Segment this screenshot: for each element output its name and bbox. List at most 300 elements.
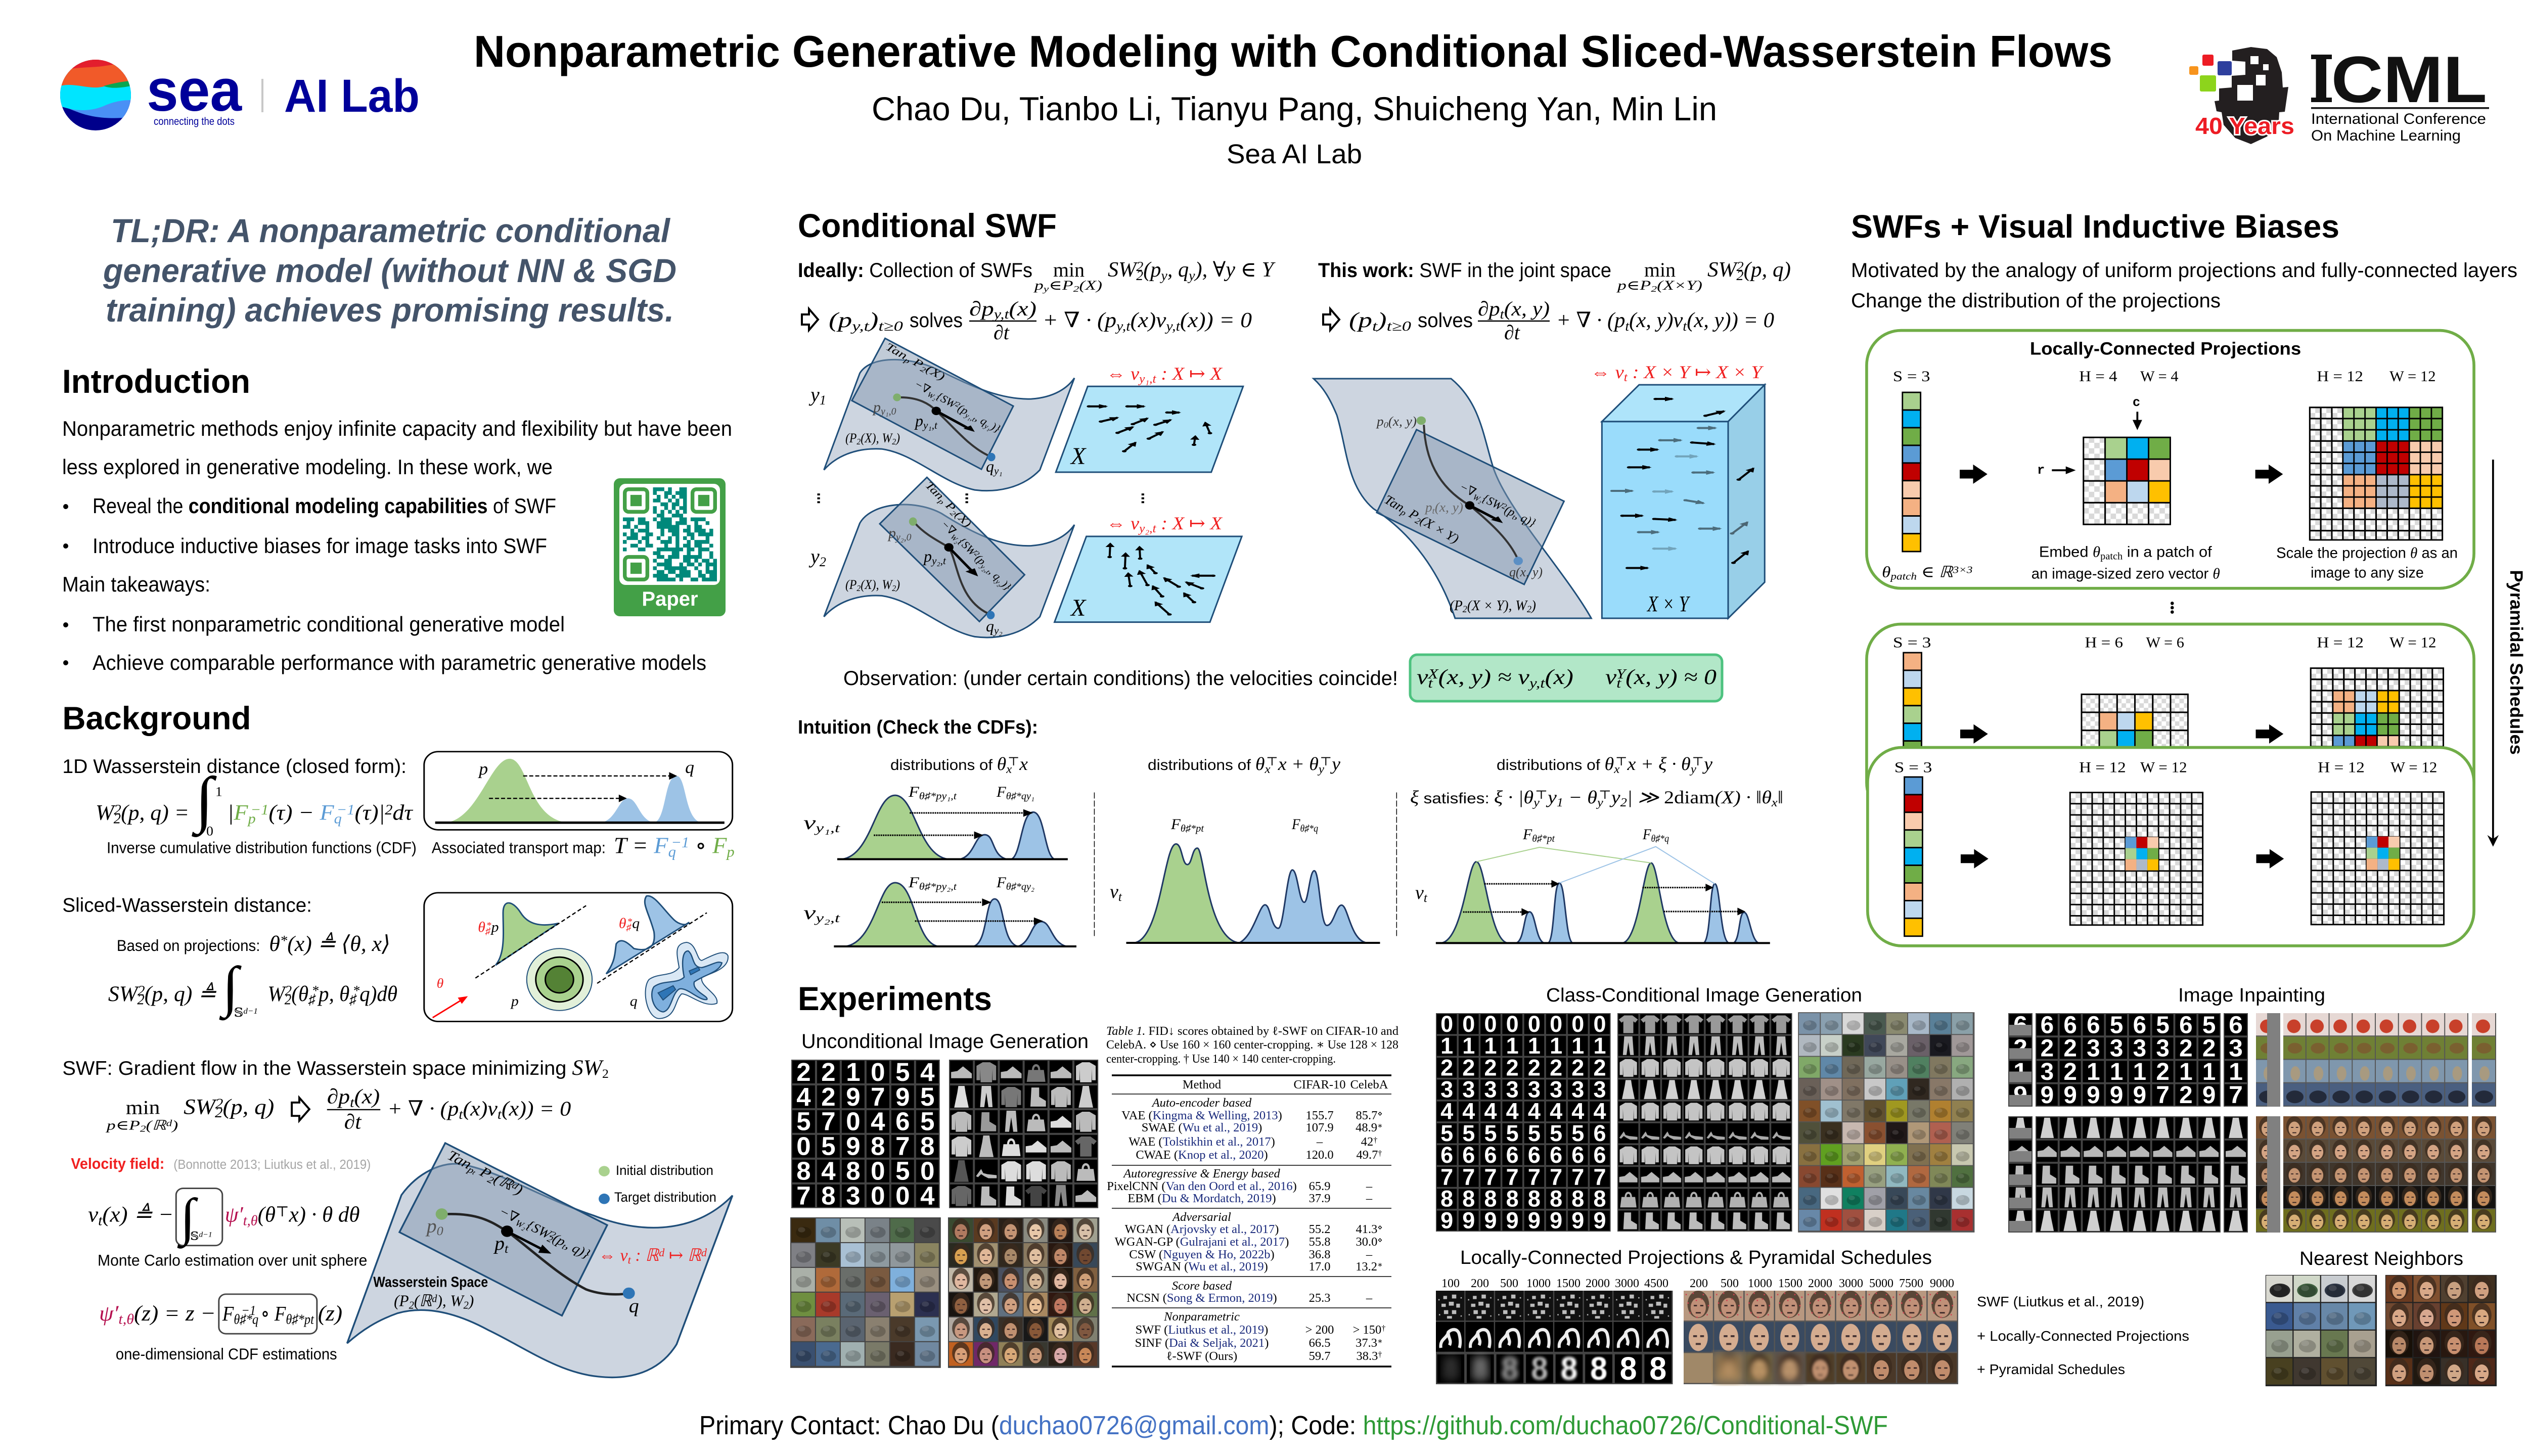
table: FID scores: > 150† (1353, 1323, 1385, 1337)
label text: joint space: q(x, y) (1509, 565, 1543, 579)
label text: CDF densities: vt (1415, 882, 1428, 905)
axis labels: iteration counts MNIST: 1500 (1556, 1277, 1581, 1290)
panel: locally-connected projections: θpatch ∈ ℝ 3×3 (1882, 563, 1973, 582)
title: Nonparametric Generative Modeling with Conditional Sliced-Wasserstein Flows (474, 26, 2112, 76)
panel: projection patch H=12 (1868, 748, 2474, 946)
table: FID scores: ℓ-SWF (Ours) (1166, 1349, 1237, 1363)
subheading: class-conditional: Class-Conditional Image Generation (1546, 985, 1862, 1006)
table: FID scores: 25.3 (1309, 1291, 1330, 1305)
text: ideally (798, 258, 1276, 294)
diagram: Wasserstein space manifold: pt (493, 1233, 509, 1256)
label text: y1 diagram: qy₁ (986, 457, 1003, 477)
label: pyramidal: + Pyramidal Schedules (1977, 1361, 2125, 1377)
text: ideally: Ideally: Collection of SWFs (798, 259, 1032, 282)
formula: this work continuity: ∂t (1504, 321, 1520, 344)
diagram: velocity box X x Y (1602, 385, 1765, 618)
image grid: class-conditional Fashion (1617, 1013, 1792, 1232)
subheading: unconditional: Unconditional Image Generation (801, 1030, 1089, 1053)
image grid: class-conditional MNIST: 55555556 (1440, 1120, 1606, 1146)
logo: Sea AI Lab (60, 57, 420, 130)
table: FID scores: 65.9 (1309, 1179, 1330, 1193)
text: 1D Wasserstein: 1D Wasserstein distance (closed form): (62, 756, 407, 778)
formula: W2: W22(p, q) = (96, 800, 189, 827)
image grid: inpainting CelebA (2256, 1116, 2496, 1233)
table: FID scores: EBM (Du & Mordatch, 2019) (1127, 1192, 1276, 1205)
formula: psi: ψ′t,θ(z) = z − (99, 1301, 216, 1327)
caption: transport map: Associated transport map: (432, 839, 606, 856)
formula: gradient flow (105, 1085, 571, 1134)
table: FID scores: Score based (1172, 1279, 1232, 1293)
image grid: inpainting Fashion (2008, 1116, 2248, 1233)
label: SWF: SWF (Liutkus et al., 2019) (1977, 1294, 2144, 1309)
legend: initial distribution: Initial distribution (616, 1163, 713, 1178)
label: pyramidal schedules: Pyramidal Schedules (2506, 570, 2526, 755)
image grid: CIFAR samples (790, 1217, 941, 1368)
axis labels: iteration counts CelebA: 2000 (1808, 1277, 1832, 1290)
table: FID scores: Autoregressive & Energy based (1122, 1167, 1281, 1180)
axis labels: iteration counts MNIST: 500 (1500, 1277, 1518, 1290)
label text: CDF densities: Fθ♯*p y₁,t (908, 784, 957, 802)
label text: joint space: (P2(X × Y), W2) (1450, 598, 1536, 614)
image grid: nearest neighbors CIFAR (2266, 1275, 2377, 1386)
text: based on projections: Based on projections: (117, 937, 260, 954)
formula: this work continuity: + ∇ · (pt(x, y)vt(x, y)) = 0 (1556, 309, 1774, 334)
label text: CDF densities: Fθ♯*p y₂,t (908, 874, 957, 892)
text: ideally: SW22(py, qy), ∀y ∈ Y (1108, 258, 1276, 283)
table: FID scores: 36.8 (1309, 1248, 1330, 1261)
axis labels: iteration counts MNIST: 2000 (1586, 1277, 1610, 1290)
label text: CDF densities: Fθ♯*q (1291, 816, 1318, 834)
text: this work: This work: SWF in the joint space (1318, 259, 1611, 282)
image grid: class-conditional MNIST: 66666666 (1440, 1142, 1606, 1168)
label text: CDF densities: Fθ♯*q (1642, 826, 1669, 844)
text: SWF gradient flow: SWF: Gradient flow in the Wasserstein space minimizing SW2 (62, 1055, 609, 1081)
subheading: LCP and pyramidal: Locally-Connected Projections & Pyramidal Schedules (1460, 1247, 1932, 1268)
panel: projection patch H=12: H = 12 (2318, 759, 2365, 776)
table: FID scores: 41.3⋄ (1356, 1222, 1382, 1236)
table: FID scores: – (1366, 1248, 1373, 1261)
subheading: inpainting: Image Inpainting (2178, 985, 2325, 1006)
image grid: class-conditional MNIST: 00000000 (1440, 1011, 1606, 1037)
diagram: Wasserstein space manifold: −∇W₂{SW22(pt, q)} (496, 1204, 593, 1262)
image grid: Fashion samples (949, 1060, 1098, 1208)
text: this work: SW22(p, q) (1707, 258, 1791, 283)
table: FID scores: SWF (Liutkus et al., 2019) (1136, 1323, 1268, 1337)
table: FID scores: SINF (Dai & Seljak, 2021) (1135, 1336, 1269, 1350)
text: observation: Observation: (under certain conditions) the velocities coincide! (843, 667, 1398, 690)
image grid: MNIST samples: 783004 (796, 1181, 935, 1210)
image grid: inpainting MNIST: 66656565 (2041, 1012, 2216, 1039)
formula: SW: 𝕊d−1 (234, 1006, 258, 1020)
footer: contact: Primary Contact: Chao Du (duchao0726@gmail.com); Code: https://github.com/duchao0726/Conditional-SWF (699, 1411, 1888, 1440)
label text: CDF densities (803, 784, 1669, 925)
dots (2171, 602, 2174, 614)
label text: CDF densities: v y₁,t (803, 812, 840, 835)
introduction text: Introduce inductive biases for image tasks into SWF (93, 534, 547, 558)
label text: y1 diagram: (P2(X), W2) (845, 431, 900, 446)
section: Background (62, 700, 735, 1378)
image grid: inpainting MNIST: 1 (2013, 1059, 2027, 1085)
label text: joint space: Tanp P2(X × Y) (1381, 492, 1461, 547)
image grid: LCP MNIST progress: 8 (1531, 1351, 1548, 1387)
image grid: inpainting MNIST: 32111211 (2041, 1059, 2216, 1085)
formula: W2: ∫ (192, 764, 217, 838)
label text: y2 diagram: (P2(X), W2) (845, 577, 900, 593)
formula: gradient flow: ∂t (344, 1111, 362, 1133)
heading: SWFs + Visual Inductive Biases: SWFs + Visual Inductive Biases (1851, 208, 2339, 245)
axis labels: iteration counts CelebA: 1000 (1748, 1277, 1772, 1290)
chart: 1D transport box: q (685, 758, 694, 777)
text: ideally: p y∈P 2(X) (1033, 278, 1102, 294)
formula: W2: 0 (206, 824, 213, 839)
panel: locally-connected projections: Scale the projection θ as an (2276, 544, 2458, 561)
table: FID scores: CelebA. ⋄ Use 160 × 160 center-cropping. ∗ Use 128 × 128 (1106, 1038, 1398, 1052)
formula: SW: W22(θ♯*p, θ♯*q)dθ (267, 981, 397, 1008)
table: FID scores: 38.3† (1357, 1349, 1382, 1363)
formula: transport map: T = Fq−1 ∘ Fp (614, 834, 735, 860)
diagram: velocity plane y1 (1056, 386, 1243, 472)
introduction text: Reveal the conditional modeling capabilities of SWF (93, 494, 556, 518)
callout: velocity coincide (1410, 655, 1722, 701)
diagram: Wasserstein space manifold (347, 1143, 733, 1378)
table: FID scores: 42† (1361, 1135, 1377, 1149)
diagram: Wasserstein space manifold: (P2(ℝd), W2) (394, 1292, 474, 1311)
image grid: inpainting MNIST: 22333322 (2041, 1035, 2216, 1062)
diagram: velocity plane y2 (1055, 536, 1242, 622)
panel: locally-connected projections (1867, 331, 2474, 588)
label text: y1 diagram: Tanp P2(X) (883, 340, 947, 384)
axis labels: iteration counts CelebA (1690, 1277, 1954, 1290)
label text: joint space: ⇔ vt : X × Y ↦ X × Y (1591, 362, 1764, 384)
chart: sliced projection box: θ♯*q (619, 916, 640, 933)
panel: projection patch H=12: S = 3 (1894, 759, 1932, 776)
logo: ICML: On Machine Learning (2311, 127, 2461, 144)
diagram: Wasserstein space manifold: ⇔ vt : ℝd ↦ ℝd (599, 1246, 707, 1266)
formula: gradient flow: + ∇ · (pt(x)vt(x)) = 0 (387, 1097, 571, 1122)
label text: CDF densities: Fθ♯*qy₂ (996, 874, 1034, 892)
TL;DR statement: TL;DR: A nonparametric conditional (111, 212, 671, 249)
logo: ICML: ICML (2311, 42, 2487, 116)
table: FID scores: 120.0 (1305, 1148, 1334, 1162)
label text: y2 diagram: Tanp P2(X) (922, 479, 974, 531)
formula: ideally continuity (802, 297, 1252, 344)
label text: joint space (1376, 362, 1764, 614)
introduction text: The first nonparametric conditional generative model (93, 612, 565, 636)
caption: inverse CDF: Inverse cumulative distribution functions (CDF) (107, 839, 417, 856)
table: FID scores: – (1316, 1135, 1323, 1149)
image grid: inpainting MNIST: 99999729 (2041, 1082, 2216, 1109)
caption: Monte Carlo: Monte Carlo estimation over unit sphere (98, 1251, 367, 1269)
table: FID scores: Nonparametric (1163, 1310, 1240, 1324)
axis labels: iteration counts CelebA: 200 (1690, 1277, 1708, 1290)
label text: velocity planes: ⇔ vy₂,t : X ↦ X (1106, 513, 1223, 535)
axis labels: iteration counts CelebA: 9000 (1930, 1277, 1954, 1290)
table: FID scores: SWAE (Wu et al., 2019) (1142, 1121, 1262, 1134)
image grid: inpainting CIFAR (2256, 1013, 2496, 1107)
axis labels: iteration counts MNIST: 200 (1471, 1277, 1489, 1290)
panel group: projection panels (1867, 331, 2526, 946)
label text: y1 diagram: py₁,0 (872, 399, 896, 417)
panel: projection patch H=6 (1867, 624, 2474, 817)
TL;DR statement: training) achieves promising results. (106, 291, 674, 329)
label text: y2 diagram: py₂,0 (887, 525, 912, 543)
image grid: LCP MNIST progress: 88 (1620, 1351, 1666, 1387)
table: FID scores: WGAN-GP (Gulrajani et al., 2017) (1115, 1235, 1289, 1249)
table: FID scores: PixelCNN (Van den Oord et al., 2016) (1107, 1179, 1297, 1193)
panel: projection patch H=12: H = 12 (2079, 759, 2126, 776)
image grid: class-conditional MNIST: 77777777 (1440, 1164, 1606, 1190)
axis labels: iteration counts CelebA: 1500 (1778, 1277, 1802, 1290)
axis labels: iteration counts MNIST (1441, 1277, 1668, 1290)
formula: W2 (96, 764, 414, 839)
axis labels: iteration counts CelebA: 7500 (1899, 1277, 1923, 1290)
label text: CDF densities: Fθ♯*pt (1170, 816, 1204, 834)
callout: velocity coincide: vtY(x, y) ≈ 0 (1605, 666, 1717, 691)
chart: sliced projection box: q (630, 993, 638, 1009)
text: motivation: Motivated by the analogy of uniform projections and fully-connected layers (1851, 259, 2517, 282)
heading: Experiments: Experiments (798, 980, 992, 1017)
label: locally connected: + Locally-Connected Projections (1977, 1328, 2189, 1344)
diagram: Wasserstein space manifold: q (629, 1296, 639, 1316)
image grid: class-conditional MNIST: 44444444 (1440, 1099, 1606, 1124)
formula: ideally continuity: ∂p y,t(x) (969, 297, 1036, 322)
chart: 1D transport box: p (477, 759, 488, 779)
TL;DR statement: generative model (without NN & SGD (103, 252, 676, 289)
formula: W2: |Fp−1(τ) − Fq−1(τ)|2dτ (228, 800, 414, 827)
image grid: class-conditional MNIST: 33333333 (1440, 1077, 1606, 1103)
image grid: inpainting MNIST: 6 (2229, 1012, 2243, 1038)
table: FID scores: VAE (Kingma & Welling, 2013) (1121, 1109, 1282, 1122)
formula: ideally continuity: (p y,t)t≥0 (829, 309, 903, 334)
text: Sliced-Wasserstein: Sliced-Wasserstein distance: (62, 895, 312, 916)
panel: locally-connected projections: Embed θpatch in a patch of (2039, 543, 2213, 562)
image grid: class-conditional MNIST: 99999999 (1440, 1208, 1606, 1234)
panel: projection patch H=6: W = 12 (2389, 634, 2436, 651)
table: FID scores: Auto-encoder based (1151, 1096, 1252, 1110)
table: FID scores: 66.5 (1309, 1336, 1330, 1350)
heading: Conditional SWF: Conditional SWF (798, 207, 1057, 244)
formula: ideally continuity: ∂t (994, 321, 1010, 344)
label text: joint space: p0(x, y) (1376, 414, 1417, 430)
formula: ideally continuity: solves (910, 309, 963, 332)
arrow: pyramidal schedules (2488, 460, 2499, 847)
label text: y2 diagram: py₂,t (923, 547, 946, 567)
axis labels: iteration counts CelebA: 3000 (1839, 1277, 1863, 1290)
table: FID scores: NCSN (Song & Ermon, 2019) (1126, 1291, 1277, 1305)
panel: projection patch H=6: H = 6 (2085, 634, 2123, 651)
label text: joint space: pt(x, y) (1424, 500, 1463, 516)
table: FID scores: CSW (Nguyen & Ho, 2022b) (1129, 1248, 1275, 1261)
formula: W2: 1 (215, 784, 222, 799)
table: FID scores: WAE (Tolstikhin et al., 2017) (1128, 1135, 1275, 1149)
legend: target distribution: Target distribution (614, 1190, 716, 1205)
image grid: inpainting MNIST: 3 (2229, 1035, 2243, 1062)
table: FID scores: CWAE (Knop et al., 2020) (1136, 1148, 1268, 1162)
panel: locally-connected projections: c (2133, 395, 2140, 410)
label text: CDF densities: v y₂,t (803, 902, 840, 925)
formula: velocity: ψ′t,θ(θ⊤x) · θ dθ (225, 1202, 359, 1228)
image grid: inpainting MNIST: 2 (2013, 1035, 2027, 1062)
image grid: MNIST samples: 059878 (796, 1132, 934, 1161)
table: FID scores: 17.0 (1309, 1260, 1330, 1273)
formula: projection: θ*(x) ≜ ⟨θ, x⟩ (269, 931, 390, 956)
diagram: Wasserstein space manifold: Tanpt P2(ℝd) (444, 1148, 526, 1199)
axis labels: iteration counts MNIST: 1000 (1526, 1277, 1551, 1290)
panel: locally-connected projections: H = 12 (2317, 369, 2363, 385)
axis labels: iteration counts CelebA: 5000 (1869, 1277, 1893, 1290)
label text: y2 diagram (808, 479, 1014, 636)
panel: locally-connected projections: r (2037, 463, 2045, 478)
text: distributions labels: distributions of θx⊤x + ξ · θ y⊤y (1497, 754, 1712, 776)
axis labels: iteration counts CelebA: 500 (1721, 1277, 1739, 1290)
formula: velocity: ∫ (177, 1189, 198, 1249)
image grid: class-conditional MNIST: 88888888 (1440, 1186, 1606, 1211)
panel: projection patch H=6: S = 3 (1893, 634, 1931, 651)
panel: projection patch H=6: W = 6 (2146, 634, 2184, 651)
introduction text: Nonparametric methods enjoy infinite capacity and flexibility but have been (62, 417, 732, 440)
formula: velocity: vt(x) ≜ − (88, 1202, 173, 1228)
image grid: inpainting MNIST: 6 (2013, 1012, 2027, 1038)
formula: this work continuity: (p t)t≥0 (1349, 309, 1411, 334)
text: distributions labels (890, 754, 1783, 809)
table: FID scores: center-cropping. † Use 140 × 140 center-cropping. (1106, 1052, 1336, 1066)
image grid: inpainting MNIST (2008, 1012, 2248, 1109)
table: FID scores: 59.7 (1309, 1349, 1330, 1363)
panel: locally-connected projections: image to any size (2311, 564, 2424, 581)
label text: y1 diagram (808, 340, 1003, 477)
formula: gradient flow: ∂pt(x) (327, 1085, 380, 1110)
label text: y1 diagram: py₁,t (914, 412, 938, 431)
subheading: nearest neighbors: Nearest Neighbors (2299, 1248, 2463, 1269)
image grid: CelebA samples (948, 1217, 1099, 1368)
panel: projection patch H=12: W = 12 (2390, 759, 2437, 776)
QR code: paper (614, 478, 726, 616)
chart: 1D transport box (424, 752, 733, 830)
text: this work: p∈P 2(X×Y) (1616, 278, 1702, 294)
table: FID scores: 55.8 (1309, 1235, 1330, 1249)
diagram: conditional manifolds y1 y2 (818, 338, 1144, 638)
image grid: LCP MNIST progress: 8 (1590, 1351, 1607, 1387)
logo: ICML (2189, 42, 2489, 144)
image grid: inpainting MNIST: 7 (2229, 1082, 2243, 1109)
formula: ideally continuity: + ∇ · (p y,t(x)vy,t(x)) = 0 (1043, 309, 1252, 334)
label text: y2 diagram: y2 (808, 545, 826, 569)
heading: Background: Background (62, 700, 251, 736)
label text: velocity planes: ⇔ vy₁,t : X ↦ X (1106, 363, 1223, 386)
image grid: inpainting MNIST: 1 (2229, 1059, 2243, 1085)
table: FID scores: 37.3∗ (1356, 1336, 1383, 1350)
label text: CDF densities: vt (1110, 881, 1122, 904)
image grid: LCP MNIST progress: 8 (1442, 1351, 1459, 1387)
formula: gradient flow: SW22(p, q) (184, 1095, 274, 1121)
formula: gradient flow: p∈P 2(ℝ d) (105, 1118, 178, 1134)
formula: SW: SW22(p, q) ≜ (108, 981, 216, 1008)
table: FID scores: WGAN (Arjovsky et al., 2017) (1125, 1222, 1279, 1236)
table: FID scores: 30.0⋄ (1356, 1235, 1382, 1249)
table: FID scores: > 200 (1305, 1323, 1334, 1337)
formula: velocity (88, 1189, 359, 1249)
panel: locally-connected projections: W = 4 (2140, 369, 2179, 385)
image grid: MNIST samples: 429795 (796, 1082, 934, 1111)
panel: locally-connected projections: an image-sized zero vector θ (2032, 565, 2220, 582)
diagram: joint space manifold (1314, 379, 1591, 618)
callout: velocity coincide: vtX(x, y) ≈ v y,t(x) (1417, 666, 1573, 691)
logo: ICML: International Conference (2311, 111, 2486, 127)
caption: one-dimensional CDF: one-dimensional CDF estimations (116, 1345, 337, 1363)
axis labels: iteration counts MNIST: 100 (1441, 1277, 1460, 1290)
formula: velocity: 𝕊d−1 (190, 1230, 212, 1243)
text: ideally: min (1053, 258, 1085, 281)
table: FID scores: 85.7⋄ (1356, 1109, 1382, 1122)
table: FID scores: 155.7 (1305, 1109, 1334, 1122)
chart: sliced projection box: p (510, 993, 519, 1009)
table: FID scores (1106, 1024, 1398, 1367)
label text: CDF densities: Fθ♯*qy₁ (996, 784, 1034, 802)
image grid: nearest neighbors CelebA (2385, 1275, 2497, 1386)
heading: Introduction: Introduction (62, 362, 250, 400)
table: FID scores: 13.2∗ (1356, 1260, 1383, 1273)
label text: y1 diagram: −∇W₂{SW2(py₁,t, qy₁)} (912, 378, 1003, 436)
introduction text: Achieve comparable performance with parametric generative models (93, 651, 706, 674)
table: FID scores: 48.9∗ (1356, 1121, 1383, 1134)
label text: velocity planes: X (1070, 443, 1087, 470)
table: FID scores: 55.2 (1309, 1222, 1330, 1236)
axis labels: iteration counts MNIST: 4500 (1644, 1277, 1668, 1290)
image grid: class-conditional MNIST: 22222222 (1440, 1055, 1606, 1080)
text: this work (1318, 258, 1791, 294)
diagram: Wasserstein space manifold: Wasserstein Space (373, 1275, 488, 1291)
text: change distribution: Change the distribution of the projections (1851, 290, 2221, 312)
table: FID scores: 37.9 (1309, 1192, 1330, 1205)
panel: locally-connected projections: S = 3 (1893, 369, 1930, 385)
logo: ICML: 40 Years (2195, 113, 2294, 139)
table: FID scores: CIFAR-10 (1293, 1078, 1346, 1091)
label text: joint space: −∇W₂{SW2(pt, q)} (1457, 480, 1538, 531)
image grid: LCP MNIST progress: 8 (1472, 1351, 1489, 1387)
text: distributions labels: distributions of θx⊤x + θy⊤y (1148, 754, 1340, 776)
table: FID scores: CelebA (1350, 1078, 1388, 1091)
authors: Chao Du, Tianbo Li, Tianyu Pang, Shuicheng Yan, Min Lin (872, 90, 1717, 127)
image grid: MNIST samples (791, 1058, 940, 1210)
image grid: LCP MNIST progress (1436, 1291, 1673, 1387)
table: FID scores: – (1366, 1291, 1373, 1305)
text: this work: min (1644, 258, 1676, 281)
logo: Sea AI Lab: sea (147, 57, 242, 124)
label: X x Y: X × Y (1646, 592, 1691, 616)
image grid: MNIST samples: 848050 (796, 1157, 934, 1186)
formula: psi: Fθ♯*q−1 ∘ Fθ♯*pt (222, 1302, 314, 1327)
table: FID scores: Method (1183, 1078, 1221, 1091)
text: distributions labels: ξ satisfies: ξ · |θ y⊤y1 − θ y⊤y2| ≫ 2diam (X) · ‖θ x‖ (1410, 787, 1783, 809)
text: distributions labels: distributions of θx⊤x (890, 754, 1028, 776)
image grid: class-conditional MNIST (1436, 1011, 1611, 1234)
label text: y1 diagram: y1 (808, 383, 826, 407)
panel: locally-connected projections: Locally-Connected Projections (2030, 339, 2301, 359)
formula: gradient flow: min (126, 1096, 160, 1118)
chart: CDF densities (790, 708, 1770, 946)
axis labels: iteration counts MNIST: 3000 (1615, 1277, 1639, 1290)
image grid: inpainting MNIST: 9 (2013, 1082, 2027, 1109)
formula: SW (108, 955, 397, 1021)
panel: projection patch H=6: H = 12 (2317, 634, 2364, 651)
formula: SW: ∫ (219, 955, 242, 1021)
QR code: paper: Paper (642, 588, 698, 610)
image grid: class-conditional CIFAR (1798, 1012, 1974, 1233)
introduction text: less explored in generative modeling. In these work, we (62, 455, 553, 479)
table: FID scores: SWGAN (Wu et al., 2019) (1136, 1260, 1268, 1273)
formula: this work continuity (1323, 297, 1774, 344)
introduction text: Main takeaways: (62, 572, 210, 596)
